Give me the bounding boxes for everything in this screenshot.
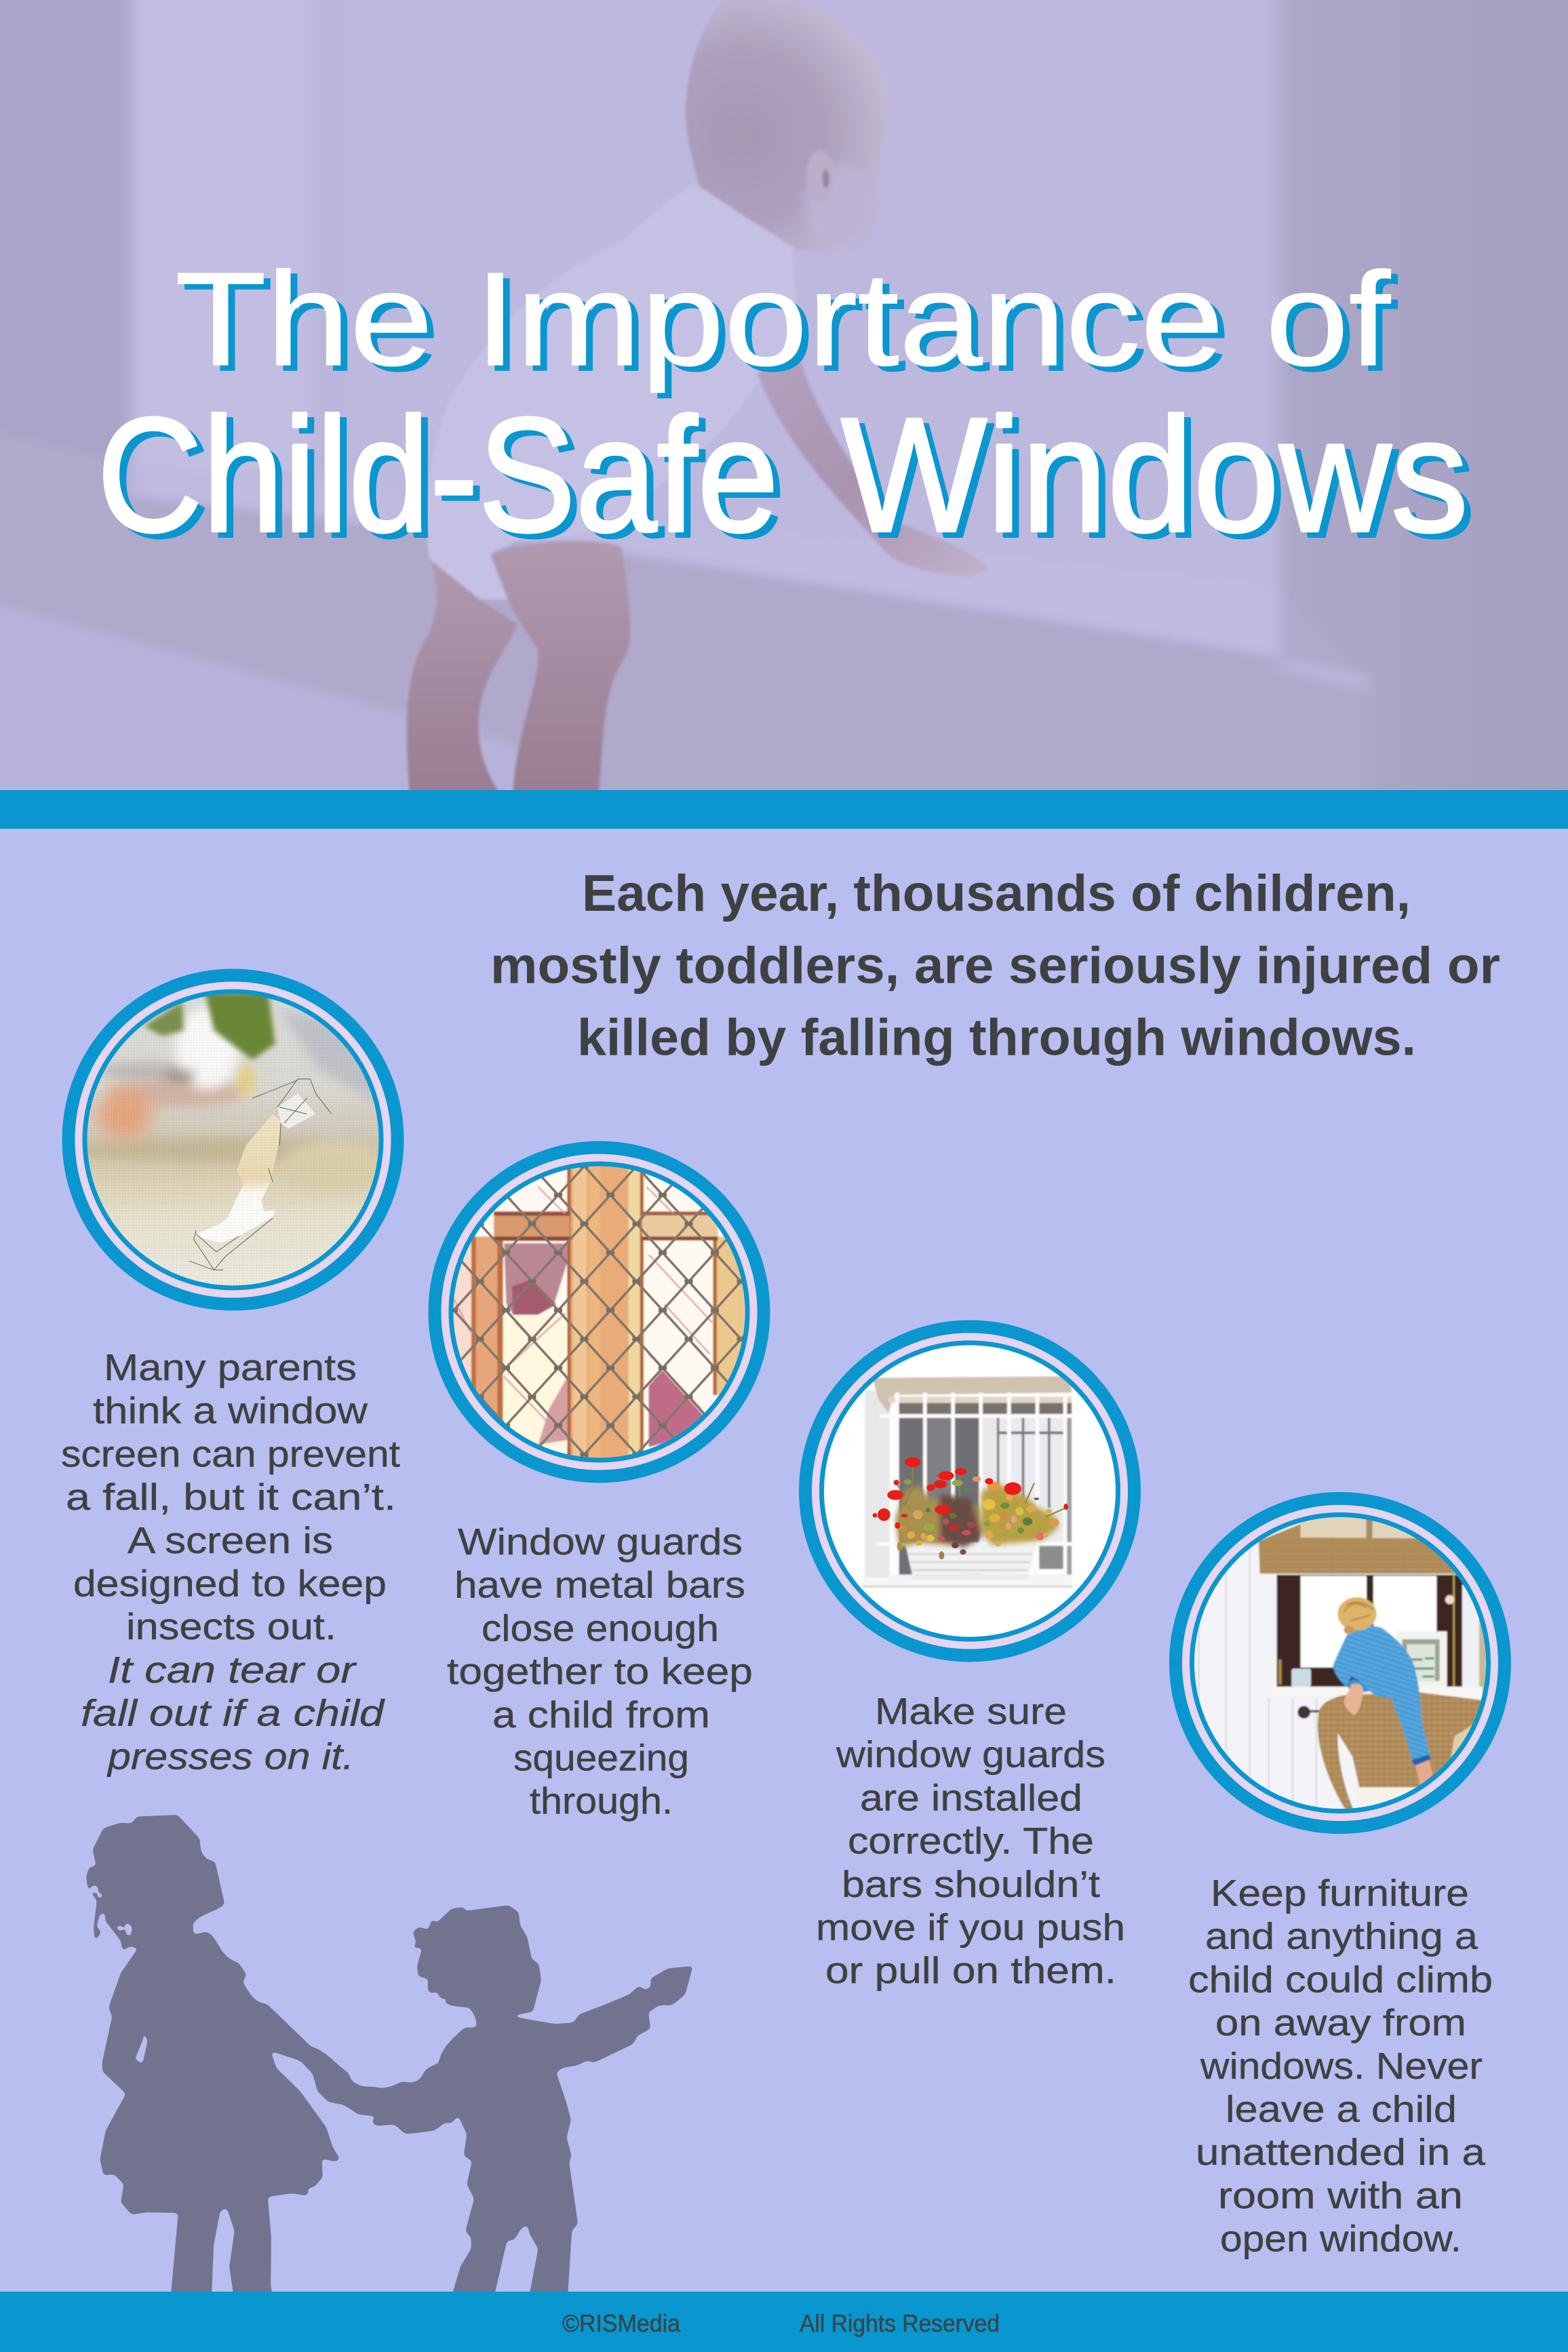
- body text: a child from: [492, 1693, 710, 1736]
- panel: correct installation: [806, 1327, 1134, 1991]
- body text: close enough: [482, 1607, 719, 1649]
- body text: It can tear or: [108, 1649, 357, 1691]
- intro statement: Each year, thousands of children,: [582, 865, 1411, 922]
- body text: [1188, 1872, 1493, 2260]
- face and ear: [803, 151, 862, 236]
- silhouette: two children holding hands: [86, 1815, 693, 2299]
- wicker chair: [1318, 1692, 1483, 1810]
- footer credits: [562, 2309, 1000, 2337]
- circular frame: [68, 975, 397, 1304]
- body text: bars shouldn’t: [842, 1863, 1100, 1905]
- right post: [713, 1236, 745, 1395]
- circular frame: [806, 1327, 1134, 1655]
- hero photo: baby at window: [0, 0, 1568, 804]
- body text: together to keep: [447, 1650, 753, 1692]
- left post: [471, 1236, 503, 1422]
- body text: [61, 1346, 400, 1777]
- body text: unattended in a: [1196, 2131, 1485, 2173]
- body text: think a window: [93, 1390, 368, 1432]
- body text: or pull on them.: [825, 1949, 1116, 1991]
- panel: window screen: [61, 975, 400, 1777]
- body text: open window.: [1220, 2218, 1462, 2260]
- near leg: [488, 541, 630, 793]
- tear in screen: [189, 1079, 332, 1270]
- body text: Make sure: [875, 1690, 1067, 1732]
- shirt: [427, 184, 799, 600]
- body text: a fall, but it can’t.: [66, 1476, 396, 1518]
- panel: furniture away from windows: [1176, 1499, 1504, 2260]
- photo: barred window with flower box: [814, 1336, 1126, 1648]
- title line 2: Windows: [841, 384, 1468, 566]
- body text: presses on it.: [106, 1735, 354, 1777]
- body text: squeezing: [513, 1736, 689, 1778]
- footer credits: ©RISMedia: [562, 2309, 681, 2337]
- body text: screen can prevent: [61, 1432, 400, 1474]
- body text: A screen is: [128, 1519, 333, 1561]
- title: [97, 245, 1468, 566]
- body text: insects out.: [126, 1605, 336, 1647]
- body text: and anything a: [1205, 1915, 1478, 1957]
- arm: [758, 360, 989, 577]
- circular frame: [435, 1148, 764, 1476]
- body text: have metal bars: [454, 1564, 745, 1606]
- photo: child climbing chair at window: [1188, 1510, 1493, 1816]
- dark reflection panes: [504, 1243, 568, 1314]
- panel: window guards: [435, 1148, 764, 1822]
- intro statement: mostly toddlers, are seriously injured or: [490, 937, 1500, 994]
- title line 2: Child-Safe: [97, 384, 779, 566]
- title line 1: The Importance of: [175, 245, 1391, 393]
- photo: lattice window guard: [448, 1160, 753, 1465]
- rails: [494, 1212, 570, 1239]
- far leg: [407, 560, 518, 793]
- body text: windows. Never: [1200, 2045, 1483, 2087]
- body text: on away from: [1215, 2001, 1466, 2043]
- body text: through.: [530, 1780, 673, 1822]
- head: [686, 0, 888, 253]
- footer credits: All Rights Reserved: [800, 2309, 1000, 2337]
- body text: Window guards: [458, 1521, 743, 1563]
- baby figure: [407, 0, 989, 793]
- body text: fall out if a child: [81, 1692, 386, 1734]
- title line 2: [97, 384, 1468, 566]
- body text: are installed: [860, 1776, 1082, 1818]
- body text: room with an: [1218, 2174, 1463, 2216]
- intro statement: [490, 865, 1500, 1066]
- flowers: [873, 1457, 1068, 1559]
- body text: correctly. The: [848, 1820, 1094, 1862]
- body text: [447, 1521, 753, 1822]
- body text: Many parents: [104, 1346, 357, 1388]
- blue band under hero: [0, 790, 1568, 829]
- central wooden post: [568, 1160, 643, 1465]
- body text: [816, 1690, 1125, 1991]
- body text: designed to keep: [73, 1563, 387, 1605]
- footer band: [0, 2292, 1568, 2352]
- body text: leave a child: [1226, 2088, 1457, 2130]
- body text: move if you push: [816, 1906, 1125, 1948]
- body text: Keep furniture: [1211, 1872, 1469, 1914]
- circular frame: [1176, 1499, 1504, 1827]
- body text: window guards: [836, 1733, 1105, 1776]
- photo: torn window screen: [87, 994, 378, 1286]
- child figure: [1333, 1597, 1433, 1786]
- body text: child could climb: [1188, 1958, 1493, 2000]
- intro statement: killed by falling through windows.: [577, 1009, 1416, 1066]
